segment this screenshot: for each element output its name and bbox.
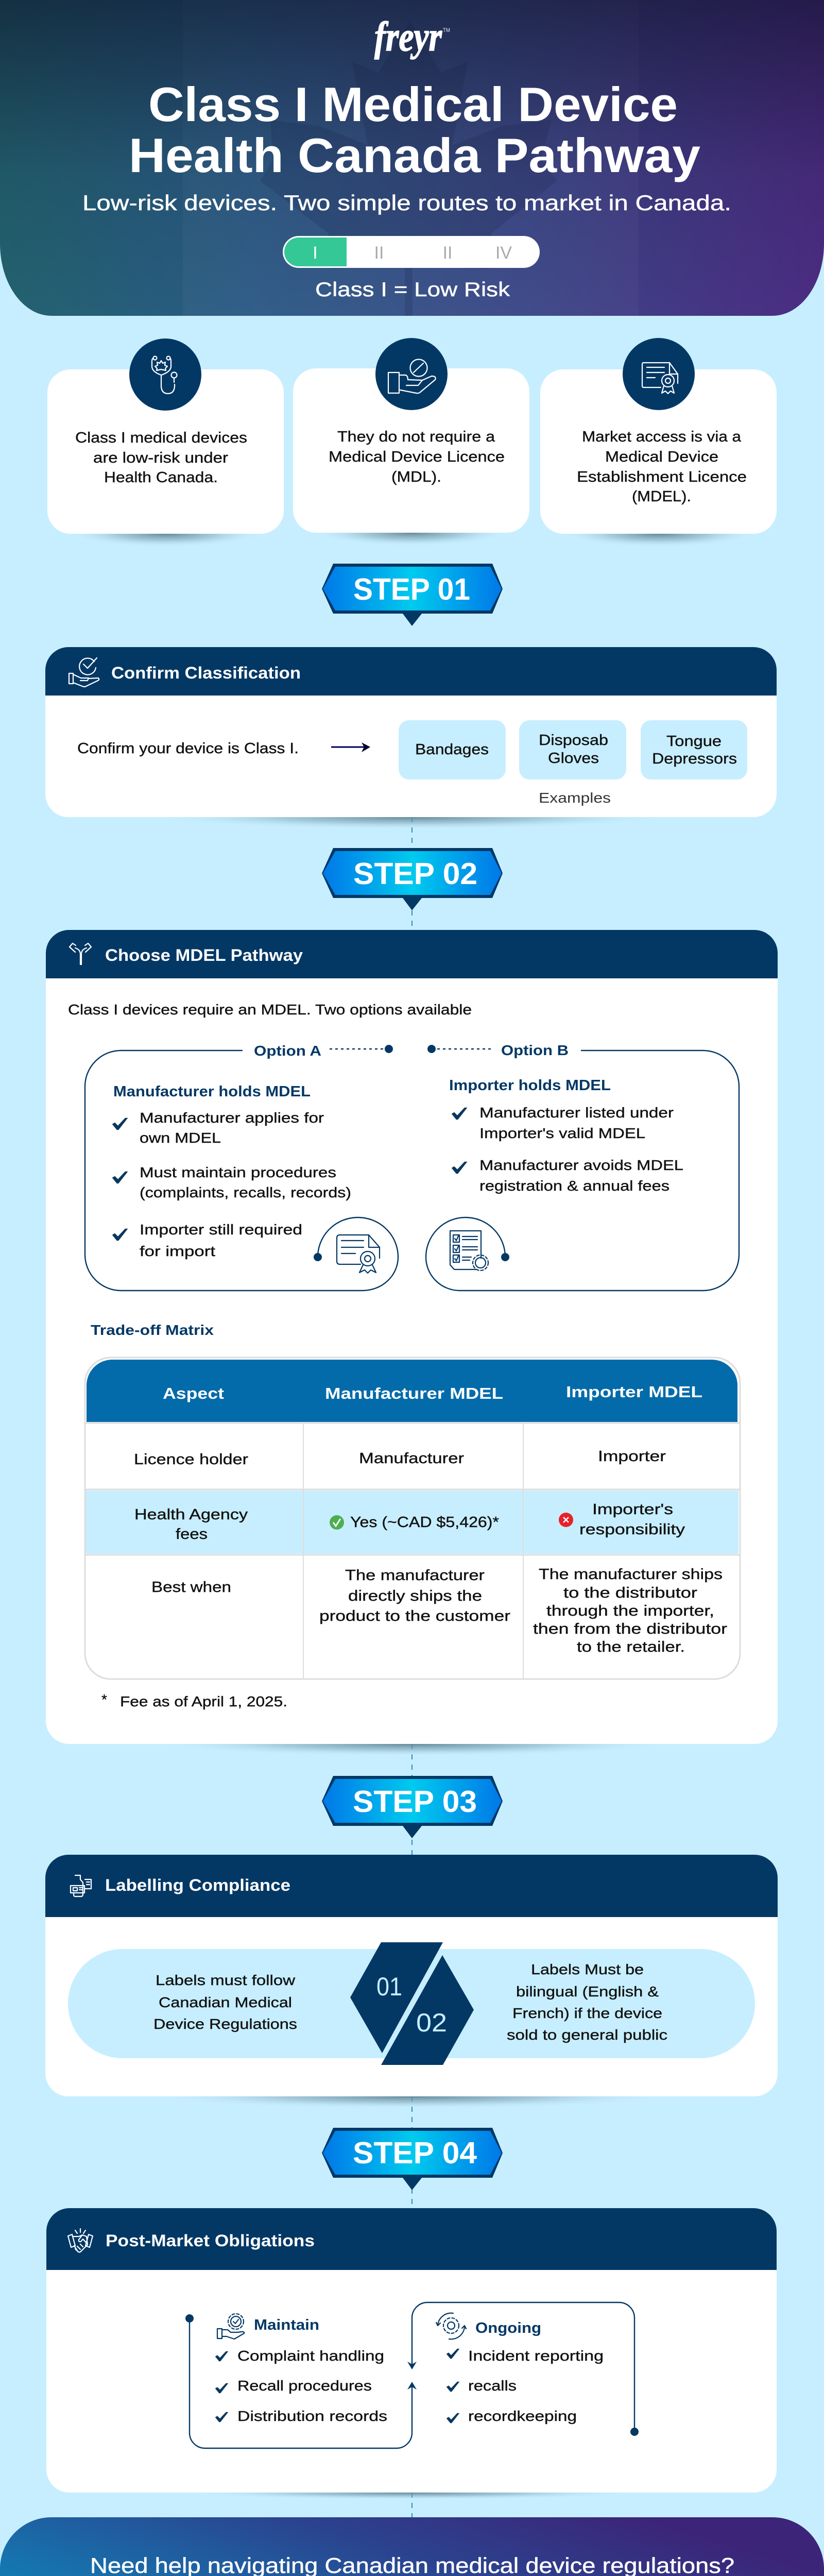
table header labels: Importer MDEL (566, 1383, 702, 1401)
comparison band (68, 1949, 755, 2058)
option A list: Importer still required (140, 1222, 302, 1238)
subtitle: Low-risk devices. Two simple routes to market in Canada. (82, 191, 731, 215)
step 04 badge (322, 2128, 503, 2190)
text: bilingual: Labels Must be (531, 1961, 644, 1977)
row: best when (151, 1566, 727, 1655)
maintain column (215, 2314, 387, 2424)
text: bilingual: French) if the device (512, 2005, 662, 2021)
example chips (399, 720, 747, 779)
table header labels: Manufacturer MDEL (325, 1384, 503, 1402)
heading: Confirm Classification (111, 664, 301, 682)
list (215, 2348, 387, 2424)
header bar (46, 2208, 777, 2270)
badge 02: 02 (416, 2008, 447, 2037)
row: health agency fees (134, 1501, 685, 1543)
step 02 badge: STEP 02 (353, 857, 477, 891)
list: recalls (468, 2378, 517, 2394)
list: Distribution records (237, 2408, 387, 2424)
badge 01 (350, 1942, 443, 2053)
panel: labelling compliance (45, 1855, 778, 2109)
class risk scale (283, 236, 540, 268)
option B list: Manufacturer avoids MDEL (479, 1157, 683, 1173)
examples caption: Examples (539, 790, 611, 806)
option A list: Must maintain procedures (140, 1164, 336, 1180)
icon: hand with prohibited pill (388, 360, 436, 393)
icon: hand with gear (217, 2314, 244, 2339)
logo: TM (443, 27, 450, 33)
option A list: own MDEL (140, 1130, 221, 1146)
list: Complaint handling (237, 2348, 384, 2364)
text: regulations: Labels must follow (156, 1972, 296, 1988)
text: Market access is via a (582, 429, 742, 445)
text: bilingual: bilingual (English & (516, 1984, 659, 1999)
option B list (452, 1105, 683, 1194)
row: health agency fees: Yes (~CAD $5,426)* (350, 1514, 499, 1531)
class risk scale: II (443, 243, 452, 263)
heading: Ongoing (475, 2320, 541, 2336)
table row highlight (85, 1490, 739, 1554)
row: health agency fees: Importer's (592, 1501, 673, 1518)
option A list: Manufacturer applies for (140, 1110, 324, 1126)
trade-off heading: Trade-off Matrix (91, 1322, 214, 1338)
risk caption: Class I = Low Risk (315, 279, 510, 301)
text: regulations (153, 1972, 297, 2032)
icon: checklist with gear (450, 1231, 488, 1270)
header bar (45, 647, 777, 696)
table grid (85, 1358, 740, 1679)
row: best when: The manufacturer (345, 1567, 485, 1584)
intro text: Class I devices require an MDEL. Two options available (68, 1002, 472, 1018)
card: no licence (293, 338, 529, 546)
class risk scale: IV (495, 243, 512, 263)
row: best when: then from the distributor (533, 1621, 727, 1637)
header banner (0, 0, 824, 316)
option B label (427, 1042, 569, 1058)
text: regulations: Device Regulations (153, 2016, 297, 2032)
example chips: Disposab (539, 732, 608, 749)
text: Medical Device (605, 449, 718, 465)
panel: confirm classification (45, 647, 777, 829)
option A label: Option A (254, 1043, 321, 1059)
row: health agency fees: fees (176, 1526, 208, 1543)
icon: red cross (559, 1513, 573, 1527)
list: Recall procedures (237, 2378, 372, 2394)
option A list: (complaints, recalls, records) (140, 1184, 351, 1200)
text: are low-risk under (93, 450, 228, 466)
text: Health Canada. (104, 469, 218, 486)
icon: licence certificate (337, 1235, 380, 1273)
text (329, 429, 505, 485)
row: best when: The manufacturer ships (539, 1566, 723, 1583)
list (447, 2348, 604, 2424)
option B panel (426, 1042, 739, 1291)
header bar (46, 930, 778, 978)
loop connector (185, 2302, 639, 2448)
footer call to action (0, 2517, 824, 2576)
row: licence holder: Manufacturer (359, 1450, 464, 1467)
text (577, 429, 747, 505)
text (75, 430, 247, 486)
row: best when: to the distributor (563, 1585, 697, 1601)
text: Establishment Licence (577, 469, 747, 485)
step 03 badge (322, 1776, 503, 1838)
card: market access (540, 338, 777, 547)
row: best when: to the retailer. (577, 1639, 685, 1655)
heading: Labelling Compliance (105, 1876, 290, 1894)
row: health agency fees: Health Agency (134, 1506, 248, 1523)
example chips: Tongue (666, 733, 722, 750)
text: (MDEL). (632, 488, 691, 505)
badge 02 (381, 1955, 474, 2065)
step 03 badge: STEP 03 (353, 1785, 477, 1819)
arrow (331, 742, 370, 752)
footnote: * (101, 1691, 107, 1707)
row: licence holder: Importer (598, 1448, 666, 1465)
row: licence holder: Licence holder (134, 1451, 248, 1468)
example chips: Depressors (652, 751, 737, 767)
title: Health Canada Pathway (129, 128, 700, 182)
icon: handshake (68, 2229, 93, 2252)
icon: certificate (642, 363, 678, 394)
text: regulations: Canadian Medical (159, 1994, 292, 2010)
option B label: Option B (501, 1042, 569, 1058)
icon: labelled bottle (71, 1875, 91, 1896)
text: bilingual (507, 1961, 667, 2043)
icon: hand with check badge (69, 658, 99, 687)
logo: freyr (374, 14, 442, 60)
class risk scale: II (374, 243, 384, 263)
row: best when: Best when (151, 1579, 231, 1596)
row: health agency fees: responsibility (579, 1521, 685, 1538)
example chips: Gloves (548, 750, 599, 767)
example chips: Bandages (415, 741, 489, 758)
table header labels: Aspect (163, 1384, 224, 1402)
table header (87, 1360, 737, 1422)
title: Class I Medical Device (148, 77, 678, 131)
option A label (254, 1043, 393, 1059)
row: licence holder (134, 1448, 666, 1468)
icon: green check (330, 1515, 344, 1530)
list: recordkeeping (468, 2408, 577, 2424)
text: Class I medical devices (75, 430, 247, 446)
option B list: Importer's valid MDEL (479, 1125, 645, 1141)
option A list (112, 1110, 351, 1259)
option B list: Manufacturer listed under (479, 1105, 674, 1121)
heading: Choose MDEL Pathway (105, 946, 303, 964)
heading: Maintain (254, 2317, 319, 2333)
option B heading: Importer holds MDEL (449, 1077, 611, 1094)
instruction: Confirm your device is Class I. (77, 740, 299, 757)
badge 01: 01 (376, 1972, 402, 2001)
step 01 badge: STEP 01 (353, 572, 470, 606)
trade-off matrix table (85, 1358, 740, 1679)
step 01 badge (322, 564, 503, 626)
heading: Post-Market Obligations (106, 2231, 315, 2250)
step 02 badge (322, 848, 503, 910)
table header labels (163, 1383, 702, 1402)
row: best when: through the importer, (546, 1603, 714, 1619)
panel: choose MDEL pathway (46, 930, 778, 1756)
text: They do not require a (337, 429, 495, 445)
ongoing column (436, 2313, 604, 2424)
connector lines (411, 817, 413, 2517)
step 04 badge: STEP 04 (353, 2136, 477, 2170)
list: Incident reporting (468, 2348, 604, 2364)
card: low risk (47, 338, 284, 547)
panel: post-market obligations (46, 2208, 777, 2500)
option A panel (85, 1043, 398, 1291)
option A heading: Manufacturer holds MDEL (113, 1083, 311, 1100)
footnote: Fee as of April 1, 2025. (120, 1693, 287, 1709)
class risk scale: I (313, 243, 318, 263)
option B list: registration & annual fees (479, 1178, 670, 1194)
text: Medical Device Licence (329, 449, 505, 465)
text: (MDL). (391, 469, 441, 485)
header bar (45, 1855, 778, 1917)
option A list: for import (140, 1243, 215, 1259)
icon: rotating gear (436, 2313, 466, 2339)
icon: stethoscope (152, 357, 177, 394)
title (129, 77, 700, 182)
row: best when: product to the customer (319, 1608, 510, 1624)
text: bilingual: sold to general public (507, 2027, 667, 2043)
row: best when: directly ships the (348, 1588, 482, 1604)
icon: fork arrows (70, 943, 91, 964)
